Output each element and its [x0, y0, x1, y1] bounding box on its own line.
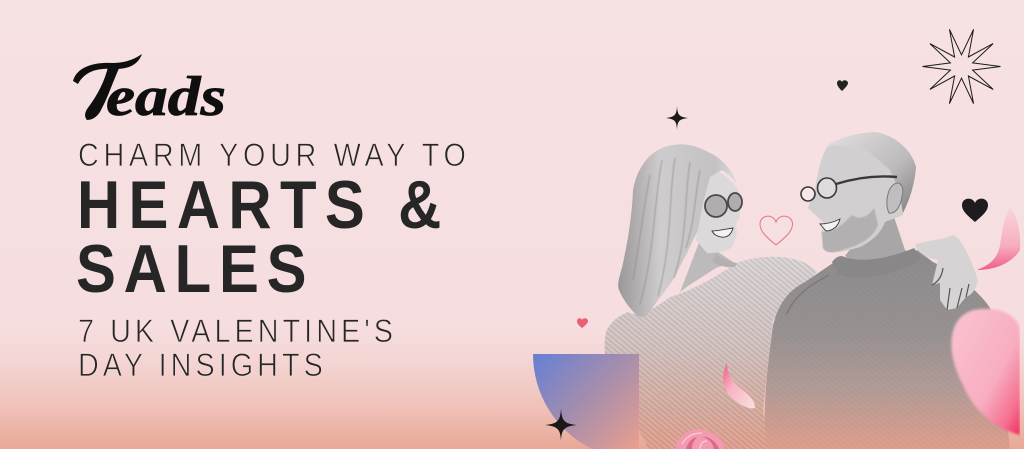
woman glasses	[705, 193, 742, 217]
man sweater	[765, 250, 1010, 449]
heading line: charm your way to: CHARM YOUR WAY TO	[78, 138, 466, 173]
woman smile	[712, 228, 733, 237]
woman hair lock at neck	[712, 254, 737, 267]
subheading: 7 UK Valentine's Day insights: 7 UK VALENTINE'S	[78, 314, 393, 349]
woman face	[696, 168, 741, 253]
icon: outlined pink heart	[760, 216, 792, 245]
logo: Teads	[73, 54, 226, 128]
man glasses	[801, 176, 897, 201]
woman neck	[680, 240, 733, 292]
petal: large blurred	[951, 309, 1020, 435]
man neck	[845, 218, 907, 260]
heading: hearts and sales: SALES	[76, 230, 307, 307]
man hair	[827, 132, 916, 213]
man	[765, 132, 1010, 449]
man collar	[832, 248, 916, 270]
rose	[676, 429, 725, 449]
woman	[605, 144, 817, 449]
heading: hearts and sales	[76, 166, 441, 307]
icon: sparkle bottom	[545, 408, 577, 441]
icon: outlined starburst	[922, 29, 1000, 104]
man ear	[887, 183, 903, 213]
petal: centre	[723, 363, 755, 408]
man smile	[820, 219, 840, 231]
man face	[808, 142, 903, 252]
subheading: 7 UK Valentine's Day insights	[78, 314, 393, 383]
people: couple photo	[605, 132, 1010, 449]
icon: large black heart	[962, 199, 988, 222]
woman sweater	[605, 257, 817, 449]
logo: Teads: eads	[106, 66, 226, 128]
woman hair	[618, 144, 738, 317]
subheading: 7 UK Valentine's Day insights: DAY INSIGHTS	[78, 348, 323, 383]
icon: sparkle top	[666, 106, 688, 130]
shape: blue gradient quarter	[533, 354, 639, 449]
man beard	[822, 208, 878, 252]
icon: small black heart	[837, 80, 848, 91]
man shoulder seam	[786, 275, 829, 315]
heading: hearts and sales: HEARTS &	[77, 166, 441, 243]
woman's hand on shoulder	[915, 235, 978, 310]
petal: top right	[977, 208, 1020, 270]
icon: small pink heart	[577, 318, 588, 328]
